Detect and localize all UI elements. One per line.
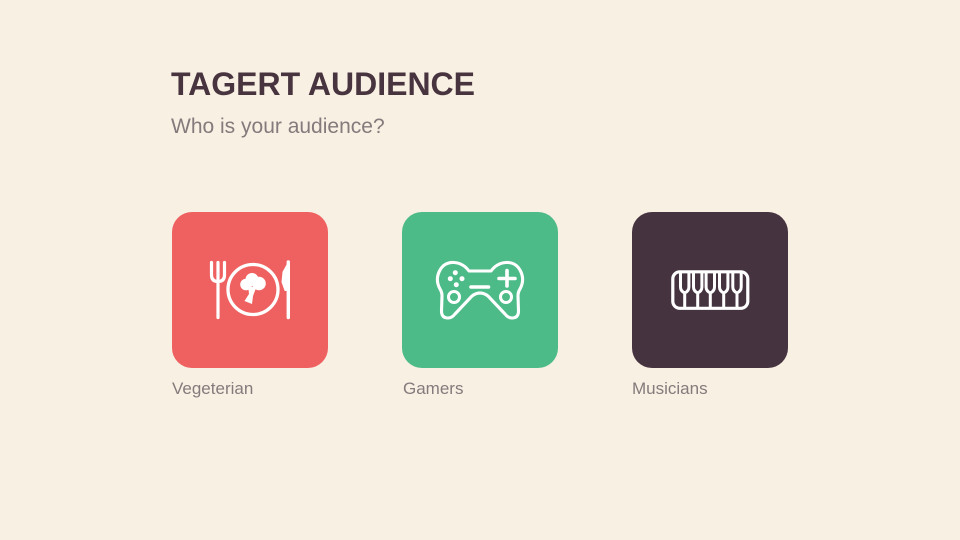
panel: gamers icon card <box>402 212 558 368</box>
title: TAGERT AUDIENCE <box>171 66 475 102</box>
panel: musicians icon card <box>632 212 788 368</box>
subtitle: Who is your audience? <box>171 115 385 138</box>
label: gamers: Gamers <box>403 379 463 398</box>
label: vegetarian: Vegeterian <box>172 379 253 398</box>
label: musicians: Musicians <box>632 379 708 398</box>
panel: vegetarian icon card <box>172 212 328 368</box>
